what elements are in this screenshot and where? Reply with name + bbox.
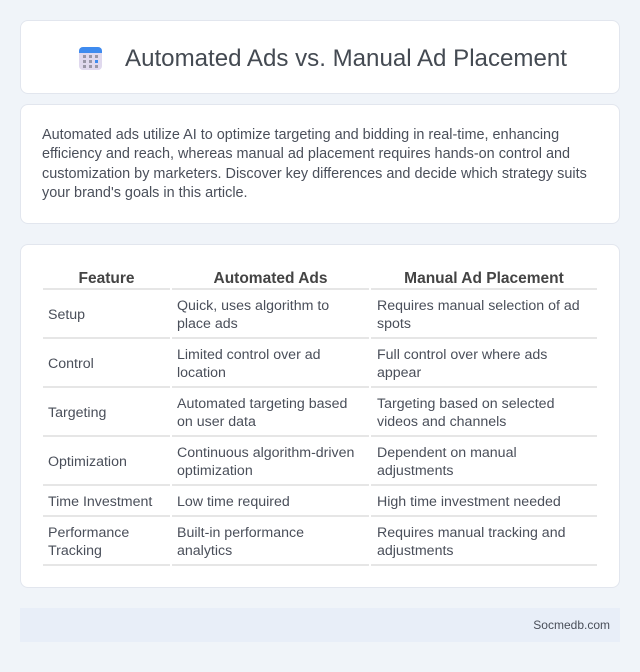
table rows: Continuous algorithm-driven [177, 445, 354, 461]
table rows: analytics [177, 543, 232, 559]
intro text: customization by marketers. Discover key differences and decide which strategy suits [42, 166, 587, 182]
table rows: Setup [48, 307, 85, 323]
table card [20, 244, 620, 588]
intro card [20, 104, 620, 224]
table rows: location [177, 365, 226, 381]
table rows: on user data [177, 414, 256, 430]
table rows: videos and channels [377, 414, 506, 430]
table rows: Tracking [48, 543, 102, 559]
icon: calendar [79, 47, 102, 70]
table rows: adjustments [377, 463, 454, 479]
footer source text: Socmedb.com [533, 618, 610, 632]
table rows: Automated targeting based [177, 396, 347, 412]
table rows: Quick, uses algorithm to [177, 298, 329, 314]
table rows: Full control over where ads [377, 347, 547, 363]
table rows: Low time required [177, 494, 290, 510]
title: Automated Ads vs. Manual Ad Placement [125, 45, 567, 72]
title card [20, 20, 620, 94]
intro text: Automated ads utilize AI to optimize targeting and bidding in real-time, enhancing [42, 127, 559, 143]
table rows: Requires manual selection of ad [377, 298, 580, 314]
table rows: Time Investment [48, 494, 152, 510]
table rows: Targeting based on selected [377, 396, 554, 412]
table header: Automated Ads [214, 270, 327, 287]
intro text [42, 127, 587, 201]
table rows: place ads [177, 316, 238, 332]
table rows: High time investment needed [377, 494, 561, 510]
table rows: Targeting [48, 405, 106, 421]
table header: Feature [78, 270, 134, 287]
table rows: adjustments [377, 543, 454, 559]
intro text: your brand's goals in this article. [42, 185, 248, 201]
table rows: spots [377, 316, 411, 332]
table rows: appear [377, 365, 421, 381]
footer [20, 608, 620, 642]
comparison table [43, 270, 597, 566]
table rows: Control [48, 356, 94, 372]
table rows: optimization [177, 463, 253, 479]
table rows: Optimization [48, 454, 127, 470]
intro text: efficiency and reach, whereas manual ad placement requires hands-on control and [42, 146, 570, 162]
table rows: Dependent on manual [377, 445, 517, 461]
table rows: Limited control over ad [177, 347, 321, 363]
table rows: Requires manual tracking and [377, 525, 565, 541]
table rows: Built-in performance [177, 525, 304, 541]
table rows: Performance [48, 525, 129, 541]
table header: Manual Ad Placement [404, 270, 564, 287]
table header [78, 270, 564, 287]
